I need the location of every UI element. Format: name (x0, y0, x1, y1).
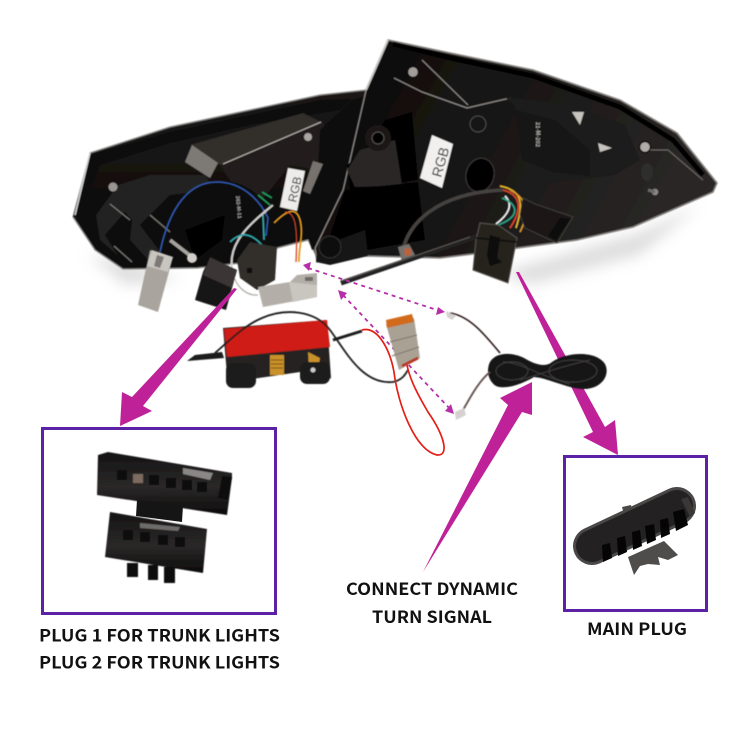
grey connector (138, 250, 173, 312)
frame (564, 456, 706, 610)
right tail light (315, 40, 717, 283)
red loop wire (362, 330, 444, 455)
plug 2 (105, 512, 207, 583)
wires (215, 312, 408, 382)
magenta arrow: plug 1 (120, 288, 237, 426)
lamp housing (73, 90, 372, 269)
frame (42, 428, 276, 614)
DT connector (386, 314, 420, 370)
lamp shadows (88, 205, 700, 285)
panel: plug 1 and 2 (42, 428, 276, 614)
cable coil (446, 311, 607, 420)
label: plug 1: PLUG 1 FOR TRUNK LIGHTS (39, 622, 280, 646)
label: plug 2: PLUG 2 FOR TRUNK LIGHTS (39, 648, 280, 674)
pins (602, 509, 688, 562)
lamp housing (315, 40, 717, 262)
RGB label (420, 135, 453, 188)
right connector (520, 198, 573, 243)
black connector (195, 257, 237, 310)
left harness (138, 182, 317, 312)
bottom mount (316, 230, 368, 265)
coil contacts (270, 355, 284, 375)
magenta arrow: main plug (516, 272, 618, 455)
left tail light (73, 90, 372, 269)
control module (187, 312, 408, 388)
dashed arrows (303, 262, 454, 414)
bolt (170, 240, 192, 257)
rim (393, 44, 703, 175)
label: connect dynamic: CONNECT DYNAMIC (346, 575, 518, 600)
panel: main plug (564, 456, 706, 610)
plug clip (136, 500, 183, 522)
dark connector (237, 242, 277, 290)
screw (108, 182, 118, 192)
lower left shadow panel (330, 182, 425, 250)
light connector (258, 273, 317, 307)
tabs (628, 541, 678, 575)
round disc (175, 181, 269, 263)
blister (96, 175, 215, 262)
black stick cable (341, 236, 478, 283)
vertical panel (300, 95, 372, 250)
mount (347, 112, 418, 190)
module base (223, 320, 331, 388)
carbon panel (190, 113, 323, 165)
colour wires (495, 186, 526, 232)
rim (73, 99, 352, 217)
wires (160, 182, 268, 252)
coil mass (488, 354, 607, 389)
grey harness wire (403, 190, 503, 250)
right tail light: 21-M-202 (534, 122, 542, 147)
plug 1 (97, 452, 232, 515)
red pad (224, 320, 330, 357)
magenta arrow: dynamic turn signal (423, 382, 532, 572)
feet (226, 363, 256, 388)
RGB label: RGB (285, 175, 305, 204)
plug shell (592, 506, 677, 546)
left tail light: 202-M-11 (234, 196, 243, 219)
main connector (473, 223, 517, 283)
slot (303, 161, 323, 194)
highlight block (185, 145, 218, 178)
label: main plug: MAIN PLUG (587, 615, 687, 640)
label: turn signal: TURN SIGNAL (372, 603, 492, 628)
ribs (394, 60, 520, 108)
screws (408, 66, 418, 78)
RGB label (280, 168, 305, 211)
RGB label: RGB (429, 145, 452, 179)
